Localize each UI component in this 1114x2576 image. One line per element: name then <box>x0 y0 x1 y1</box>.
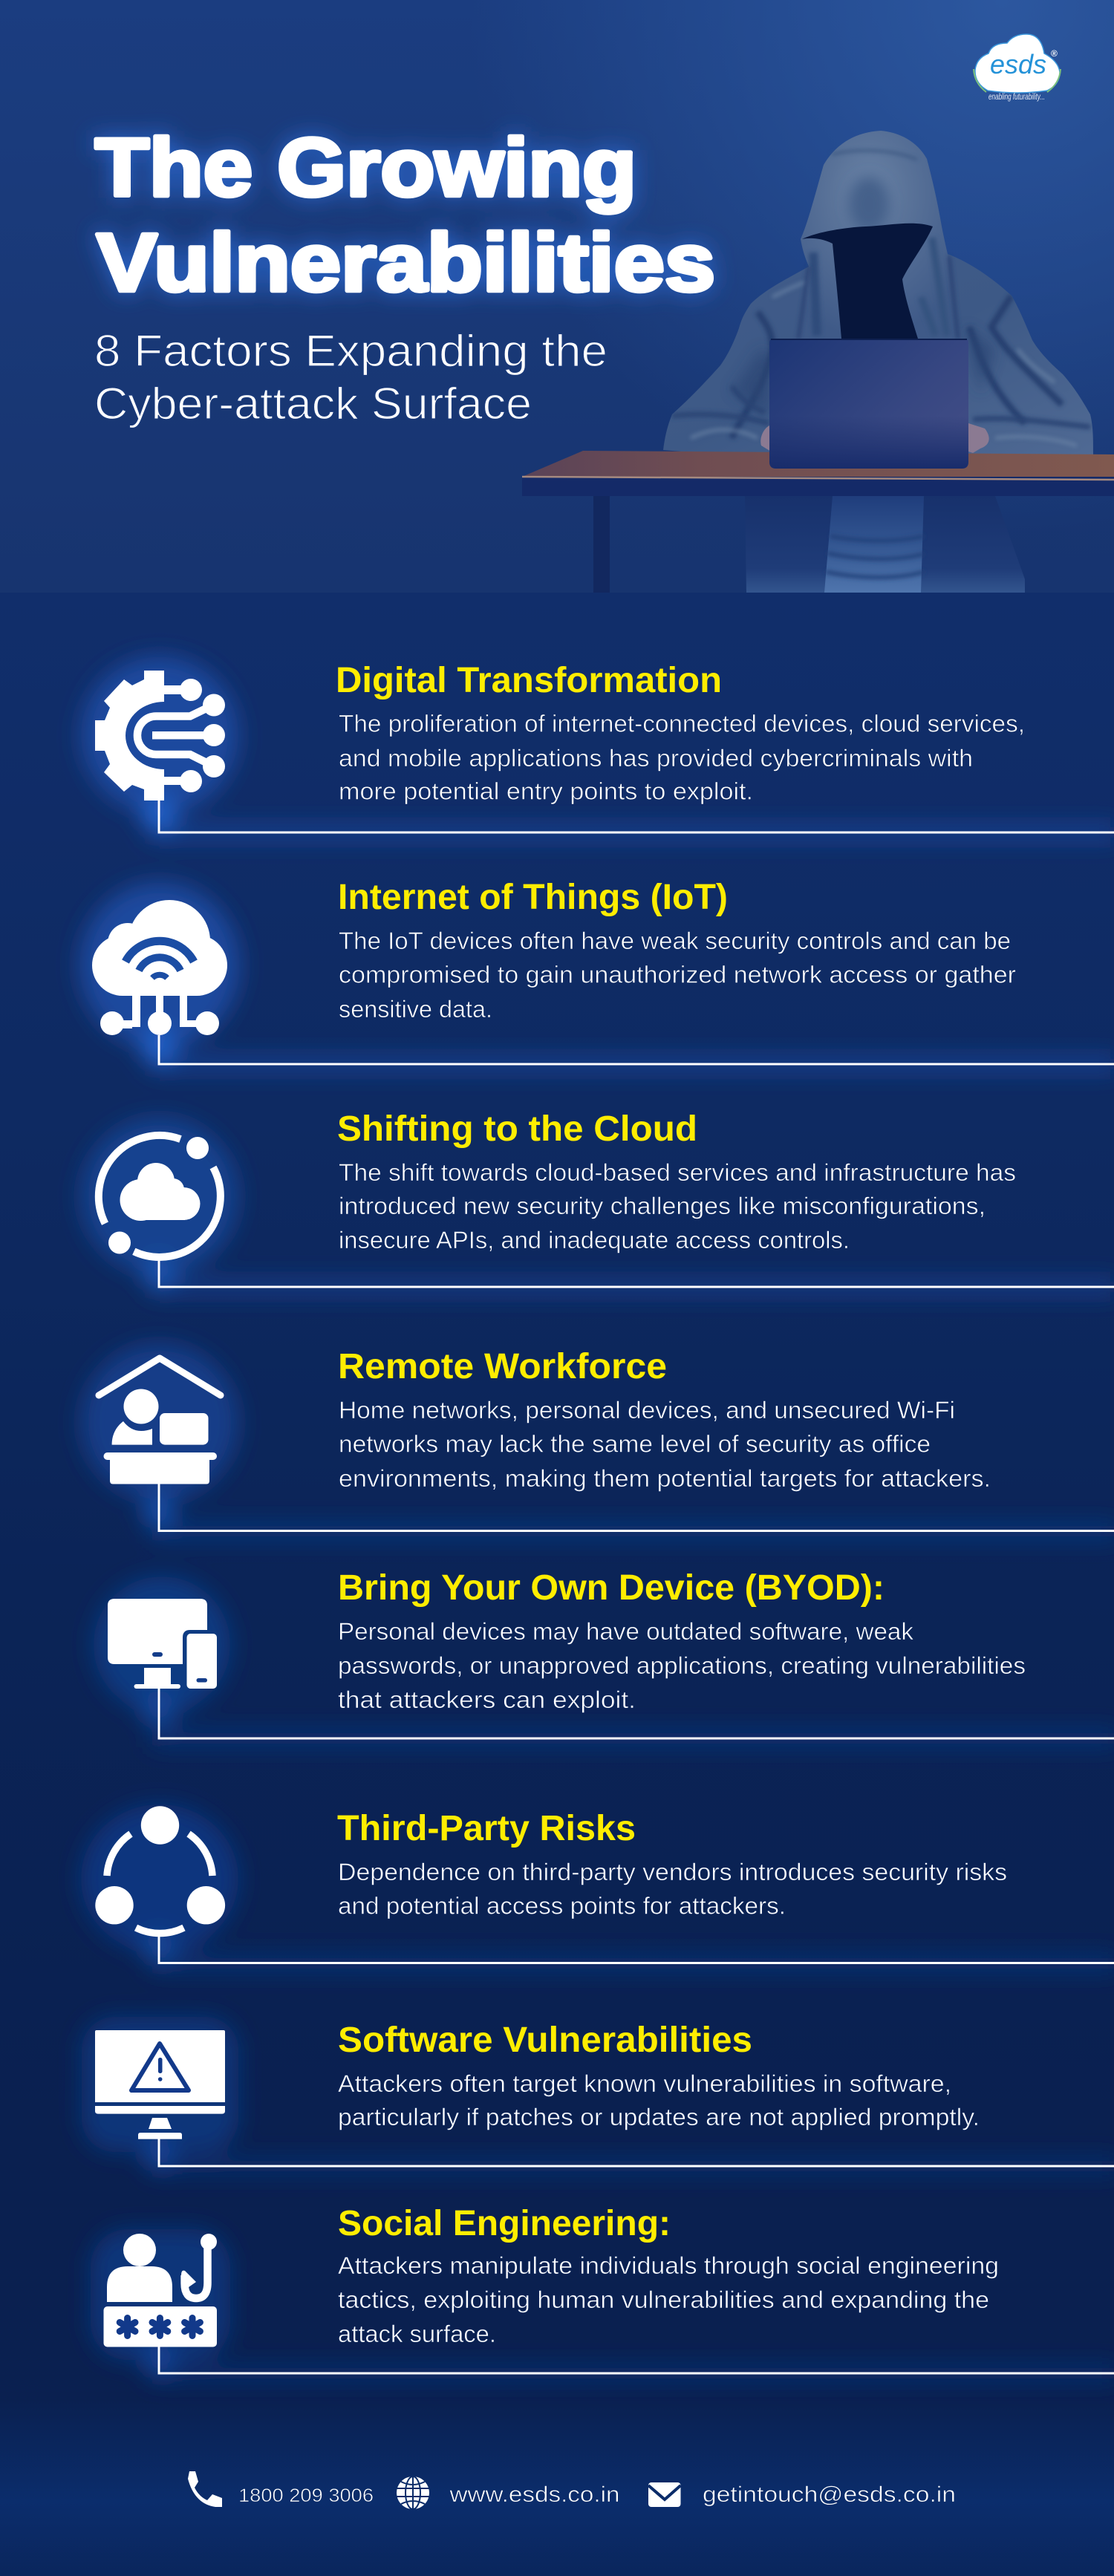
description: and mobile applications has provided cybercriminals with <box>339 745 973 772</box>
heading: Third-Party Risks <box>337 1809 636 1848</box>
title: Vulnerabilities <box>97 217 715 309</box>
logo cloud <box>975 34 1060 93</box>
description: insecure APIs, and inadequate access controls. <box>339 1227 850 1253</box>
icon: monitor with warning <box>95 2030 225 2139</box>
description <box>338 2070 980 2130</box>
item 4: Remote Workforce <box>99 1347 1114 1531</box>
hacker illustration <box>522 131 1114 593</box>
footer glow <box>0 2399 1114 2576</box>
icon: cloud with wifi <box>92 900 227 1035</box>
header panel <box>0 0 1114 593</box>
description: and potential access points for attackers. <box>338 1892 786 1919</box>
description: networks may lack the same level of security as office <box>339 1430 931 1457</box>
connector line <box>159 800 1114 832</box>
connector line <box>159 1689 1114 1738</box>
title glow: Vulnerabilities <box>97 217 715 309</box>
icon: home office <box>99 1358 221 1484</box>
description: Personal devices may have outdated software, weak <box>338 1618 914 1645</box>
connector line <box>159 1261 1114 1287</box>
description: Dependence on third-party vendors introduces security risks <box>338 1859 1007 1885</box>
description: attack surface. <box>338 2321 496 2347</box>
title glow: The Growing <box>95 122 636 214</box>
icon: monitor and phone <box>108 1599 217 1689</box>
logo wordmark: esds <box>990 49 1046 79</box>
hood <box>800 131 954 339</box>
description <box>339 1159 1016 1253</box>
laptop <box>769 339 968 469</box>
description <box>339 710 1025 805</box>
description: compromised to gain unauthorized network access or gather <box>339 962 1016 988</box>
torso and arms <box>663 254 1093 459</box>
description <box>339 1397 991 1492</box>
item 6: Third-Party Risks <box>95 1806 1114 1963</box>
description: that attackers can exploit. <box>338 1686 636 1713</box>
website: www.esds.co.in <box>449 2482 619 2507</box>
phone number: 1800 209 3006 <box>238 2485 374 2506</box>
item 1: Digital Transformation <box>95 661 1114 832</box>
item 5: BYOD <box>108 1568 1114 1738</box>
description: introduced new security challenges like misconfigurations, <box>339 1193 986 1219</box>
item 7: Software Vulnerabilities <box>95 2021 1114 2166</box>
description: passwords, or unapproved applications, creating vulnerabilities <box>338 1652 1026 1679</box>
description <box>338 2252 999 2347</box>
title: The Growing <box>95 122 636 214</box>
logo tagline: enabling futurability... <box>988 93 1045 102</box>
hood shading <box>798 151 958 339</box>
icon: cloud in orbit <box>99 1135 221 1257</box>
description: Attackers manipulate individuals through social engineering <box>338 2252 999 2279</box>
subtitle: Cyber-attack Surface <box>94 379 532 428</box>
description: The shift towards cloud-based services and infrastructure has <box>339 1159 1016 1186</box>
description: more potential entry points to exploit. <box>339 778 753 805</box>
description: Home networks, personal devices, and unsecured Wi-Fi <box>339 1397 955 1424</box>
description: The IoT devices often have weak security controls and can be <box>339 927 1011 954</box>
lower body <box>745 496 1025 593</box>
description <box>338 1618 1026 1713</box>
icon: three connected nodes <box>95 1806 225 1934</box>
icon: mail <box>648 2482 680 2507</box>
icon: globe <box>397 2476 429 2509</box>
logo hands <box>974 69 1061 92</box>
icon: gear with circuit <box>95 671 225 800</box>
description: The proliferation of internet-connected devices, cloud services, <box>339 710 1025 737</box>
heading: Remote Workforce <box>338 1347 667 1386</box>
item 3: Shifting to the Cloud <box>99 1109 1114 1287</box>
heading: Shifting to the Cloud <box>337 1109 697 1149</box>
description: sensitive data. <box>339 996 492 1023</box>
footer contact bar <box>188 2471 956 2509</box>
icon: phishing hook and password <box>104 2234 217 2347</box>
connector line <box>159 2139 1114 2166</box>
description: Attackers often target known vulnerabilities in software, <box>338 2070 951 2097</box>
logo <box>974 34 1061 102</box>
garment folds <box>672 282 1090 446</box>
title <box>95 122 715 309</box>
hands <box>760 423 989 453</box>
title glow <box>95 122 715 309</box>
table <box>522 451 1114 593</box>
connector line <box>159 1035 1114 1064</box>
email: getintouch@esds.co.in <box>703 2482 956 2507</box>
description <box>338 1859 1007 1919</box>
subtitle <box>94 326 608 428</box>
connector line <box>159 1935 1114 1963</box>
heading: Bring Your Own Device (BYOD): <box>338 1568 885 1608</box>
page background <box>0 593 1114 2576</box>
description <box>339 927 1016 1023</box>
heading: Digital Transformation <box>336 661 722 700</box>
item 2: Internet of Things <box>92 878 1114 1064</box>
description: particularly if patches or updates are not applied promptly. <box>338 2104 980 2130</box>
glow behind icons and connector lines <box>79 656 1114 2381</box>
dark face opening <box>802 224 933 339</box>
registered mark: ® <box>1051 48 1058 59</box>
item 8: Social Engineering <box>104 2204 1114 2373</box>
connector line <box>159 1484 1114 1531</box>
description: environments, making them potential targets for attackers. <box>339 1465 991 1492</box>
description: tactics, exploiting human vulnerabilities and expanding the <box>338 2286 989 2313</box>
connector line <box>159 2347 1114 2373</box>
subtitle: 8 Factors Expanding the <box>94 326 608 376</box>
heading: Internet of Things (IoT) <box>338 878 728 917</box>
icon: phone <box>188 2471 222 2507</box>
heading: Software Vulnerabilities <box>338 2021 752 2060</box>
heading: Social Engineering: <box>338 2204 671 2243</box>
